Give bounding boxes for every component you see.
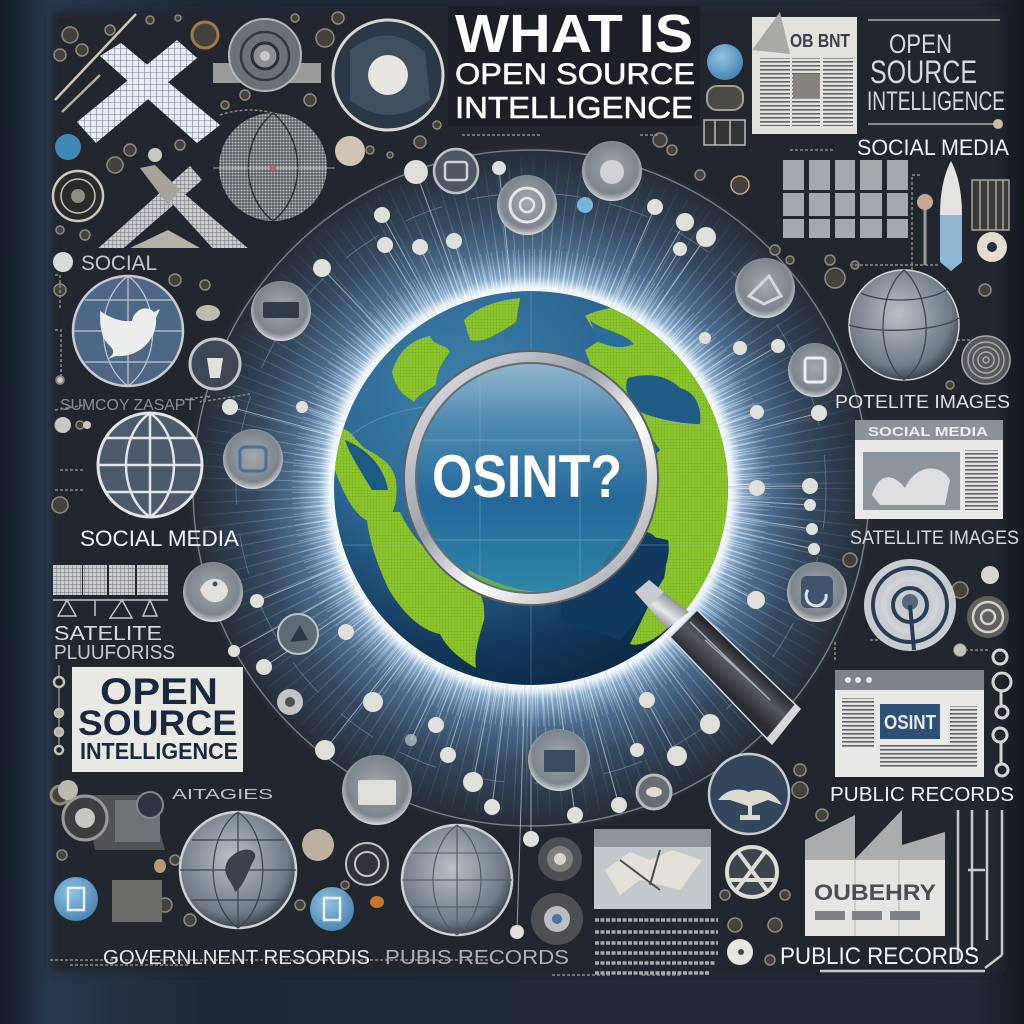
- button: [637, 775, 671, 809]
- bottom globe one: [180, 812, 296, 928]
- newspaper headline: OB BNT: [790, 31, 850, 51]
- globe: [334, 290, 730, 690]
- label: satelite: SATELITE: [54, 623, 162, 645]
- small grille icon: [707, 86, 743, 110]
- window grid: [783, 160, 908, 238]
- X mark lower: [98, 165, 248, 248]
- radial glow and rays around globe: [186, 143, 876, 833]
- photo rect: [594, 829, 711, 909]
- blue icon two: [310, 887, 354, 931]
- open source intelligence box: SOURCE: [78, 704, 237, 743]
- news box: [855, 420, 1003, 519]
- bird circle: [709, 754, 789, 834]
- beige circle: [335, 136, 365, 166]
- label: images garbled: AITAGIES: [172, 786, 273, 803]
- button: [528, 729, 590, 791]
- beige pin: [917, 194, 933, 265]
- ring icon bottom: [538, 837, 582, 881]
- browser osint text: OSINT: [884, 712, 936, 734]
- button: [223, 429, 283, 489]
- title: INTELLIGENCE: [455, 90, 693, 125]
- open source intelligence top right: OPEN: [889, 29, 952, 59]
- label: social media right: SOCIAL MEDIA: [857, 135, 1009, 160]
- grey sphere right: [849, 270, 959, 380]
- small node cluster: [55, 148, 162, 433]
- label: garbled small: SUMCOY ZASAPT: [60, 397, 195, 414]
- open source intelligence box: INTELLIGENCE: [80, 738, 238, 764]
- folded brochure: [805, 810, 945, 936]
- button: [342, 755, 412, 825]
- fingerprint: [962, 336, 1010, 384]
- browser panel: [835, 670, 984, 777]
- small node left: [53, 252, 73, 272]
- mesh sphere: [213, 113, 335, 221]
- button: [788, 343, 842, 397]
- eye circle: [53, 171, 103, 221]
- label: government records: GOVERNLNENT RESORDIS: [103, 947, 370, 969]
- lens sphere top: [333, 20, 443, 130]
- rocket: [940, 161, 962, 271]
- target radar: [864, 559, 956, 651]
- label: public records two: PUBLIC RECORDS: [780, 943, 979, 970]
- open source intelligence top right: SOURCE: [870, 54, 977, 90]
- lens label: OSINT?: [432, 443, 622, 510]
- connector lines with nodes: [222, 160, 827, 939]
- continents: [335, 298, 729, 668]
- grille: [972, 180, 1009, 230]
- label: public records: PUBIS RECORDS: [385, 947, 569, 969]
- right chain: [993, 650, 1011, 776]
- X mark top: [77, 40, 220, 143]
- label: social: SOCIAL: [81, 252, 157, 275]
- bird icon: [100, 308, 160, 359]
- blue dot left: [55, 134, 81, 160]
- small button: [278, 614, 318, 654]
- header text: SOCIAL MEDIA: [868, 424, 989, 439]
- handle: [635, 580, 800, 744]
- beige textured circle: [302, 829, 334, 861]
- spiral icon: [346, 843, 388, 885]
- small tower icon: [704, 120, 745, 145]
- ring icon bottom: [531, 893, 583, 945]
- target ring: [977, 232, 1007, 262]
- orange blob: [370, 896, 384, 908]
- white node: [727, 939, 753, 965]
- small mesh panels: [53, 565, 168, 618]
- title: OPEN SOURCE: [455, 58, 695, 91]
- machinery collage: [58, 780, 165, 850]
- open source intelligence box: [72, 667, 243, 772]
- text lines block: [595, 920, 718, 973]
- x circle icon: [727, 847, 777, 897]
- label: satellite images: SATELLITE IMAGES: [850, 528, 1019, 549]
- grey device: [112, 880, 162, 922]
- wire globe left: [98, 413, 202, 517]
- swirl circle with bar: [213, 19, 321, 91]
- label: platforms garbled: PLUUFORISS: [54, 642, 175, 664]
- newspaper: [752, 12, 857, 134]
- magnifying glass: [403, 350, 800, 744]
- node right: [981, 566, 999, 584]
- button: [251, 281, 311, 341]
- open source intelligence top right: [867, 20, 1005, 129]
- button: [183, 562, 243, 622]
- lens rim: [403, 350, 659, 606]
- left chain: [54, 665, 64, 754]
- label: public records one: PUBLIC RECORDS: [830, 784, 1014, 806]
- button: [190, 339, 240, 389]
- small node: [954, 644, 966, 656]
- blue icon one: [54, 877, 98, 921]
- label: social media left: SOCIAL MEDIA: [80, 526, 239, 551]
- vertical lines: [820, 810, 1002, 971]
- globe with bird: [73, 276, 183, 386]
- title: WHAT IS: [455, 4, 693, 64]
- blue circle right of title: [707, 44, 743, 80]
- button: [787, 562, 847, 622]
- lens glass: [417, 364, 650, 610]
- mushroom node: [196, 305, 220, 321]
- bottom globe two: [402, 825, 512, 935]
- label: potelite images: POTELITE IMAGES: [835, 392, 1010, 412]
- upper buttons: [434, 141, 642, 235]
- open source intelligence box: OPEN: [100, 671, 218, 712]
- small button: [277, 689, 303, 715]
- button: [735, 258, 795, 318]
- small beige: [154, 859, 166, 873]
- title: [448, 4, 700, 126]
- brochure text: OUBEHRY: [814, 880, 936, 905]
- swirl right: [967, 596, 1009, 638]
